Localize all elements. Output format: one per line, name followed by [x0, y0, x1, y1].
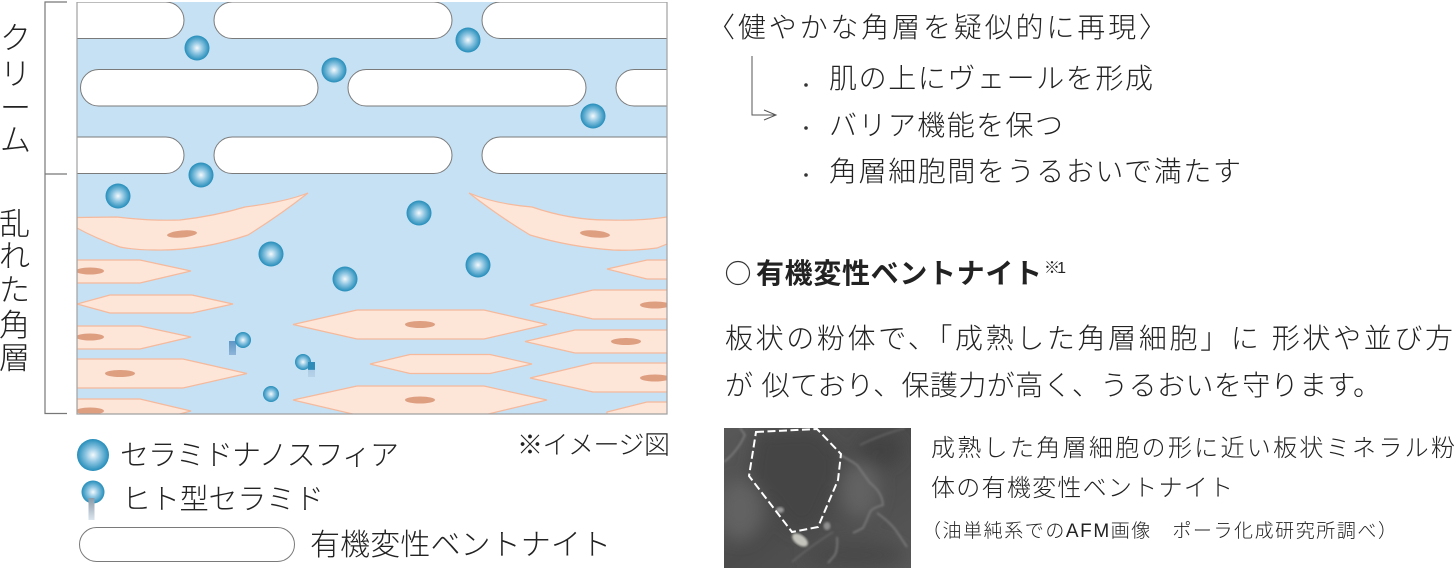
note: image diagram: ※イメージ図	[517, 430, 670, 460]
label: cream: リ	[0, 57, 31, 92]
legend: human-type ceramide: ヒト型セラミド	[122, 483, 324, 516]
legend: human-type ceramide	[82, 480, 324, 520]
photo: AFM image of the plate-shaped mineral	[718, 428, 911, 568]
label: cream: ク	[0, 21, 31, 56]
disordered corneocytes	[76, 193, 670, 418]
caption: （油単純系でのAFM画像 ポーラ化成研究所調べ）	[922, 520, 1397, 542]
heading: healthy stratum corneum: 〈健やかな角層を疑似的に再現〉	[707, 12, 1167, 43]
list: benefits: 肌の上にヴェールを形成	[829, 63, 1153, 94]
label: cream: ー	[0, 91, 31, 126]
legend: organically modified bentonite: 有機変性ベントナイト	[310, 529, 611, 562]
arrow	[752, 56, 776, 120]
bracket: layer divisions	[45, 2, 67, 414]
heading: organically modified bentonite: 有機変性ベントナイト	[756, 258, 1042, 289]
body text: 板状の粉体で、「成熟した角層細胞」に 形状や並び方	[725, 323, 1453, 354]
caption	[922, 435, 1455, 542]
diagram: cream and disordered stratum corneum	[76, 2, 668, 415]
list: benefits: バリア機能を保つ	[829, 110, 1063, 141]
body text	[725, 323, 1453, 401]
caption: 体の有機変性ベントナイト	[931, 475, 1233, 502]
body text: が 似ており、保護力が高く、うるおいを守ります。	[725, 370, 1381, 401]
cream layer: bentonite plates	[78, 2, 666, 174]
heading: organically modified bentonite: ※1	[1044, 260, 1066, 277]
diagram frame edge	[77, 2, 667, 414]
ceramide nanospheres	[106, 28, 606, 402]
list: benefits: 角層細胞間をうるおいで満たす	[829, 156, 1241, 187]
list: benefits	[804, 63, 1241, 187]
label: disordered stratum corneum	[0, 207, 30, 376]
label: cream	[0, 21, 31, 158]
human-type ceramides	[229, 332, 315, 377]
label: cream: ム	[0, 123, 31, 158]
legend: ceramide nanosphere: セラミドナノスフィア	[120, 440, 399, 472]
legend: organically modified bentonite	[80, 528, 611, 562]
caption: 成熟した角層細胞の形に近い板状ミネラル粉	[931, 435, 1455, 462]
